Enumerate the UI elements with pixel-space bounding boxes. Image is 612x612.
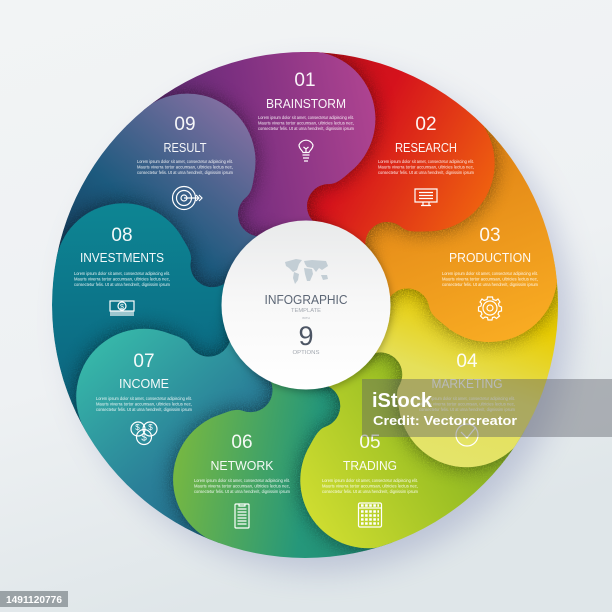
body text: Mauris viverra tortor accumsan, ultricies lectus nec, [74, 276, 170, 282]
body text: consectetur felis. Ut at urna hendrerit, dignissim ipsum [322, 489, 418, 494]
heading: PRODUCTION [449, 250, 531, 265]
body text: Lorem ipsum dolor sit amet, consectetur adipiscing elit. [322, 478, 418, 483]
petal 09 [56, 82, 276, 288]
number 07: 07 [133, 351, 155, 372]
panel: 03 production [442, 225, 538, 320]
label: options: OPTIONS [292, 350, 320, 356]
petal 03 [365, 112, 558, 357]
icon: coins [131, 422, 157, 444]
number 06: 06 [231, 432, 253, 453]
number 02: 02 [415, 114, 437, 135]
number 01: 01 [294, 70, 316, 91]
watermark: iStock: iStock [372, 390, 433, 412]
panel: 06 network [194, 432, 290, 528]
petal 08 [52, 192, 232, 432]
panel: 04 marketing [419, 351, 515, 446]
body text: Mauris viverra tortor accumsan, ultricies lectus nec, [442, 276, 538, 282]
body text [442, 271, 538, 287]
number 05: 05 [359, 432, 381, 453]
body text: consectetur felis. Ut at urna hendrerit, dignissim ipsum [378, 170, 474, 175]
body text: Lorem ipsum dolor sit amet, consectetur adipiscing elit. [258, 115, 354, 120]
body text: Mauris viverra tortor accumsan, ultricies lectus nec, [419, 402, 515, 406]
body text: Lorem ipsum dolor sit amet, consectetur adipiscing elit. [419, 396, 515, 401]
heading: TRADING [343, 458, 397, 473]
number 09: 09 [174, 114, 196, 135]
body text [96, 396, 192, 412]
wheel drop shadow [70, 70, 570, 570]
body text [419, 396, 515, 412]
heading: MARKETING [432, 376, 502, 391]
body text [258, 115, 354, 131]
petal 06 [160, 372, 392, 558]
body text [74, 271, 170, 287]
petal 01 base [143, 52, 324, 236]
heading: BRAINSTORM [266, 96, 346, 111]
body text [322, 478, 418, 494]
icon: coins: $ [135, 423, 140, 432]
icon: world map [285, 259, 328, 284]
body text: consectetur felis. Ut at urna hendrerit, dignissim ipsum [258, 126, 354, 131]
icon: coins: $ [148, 423, 153, 432]
heading: INVESTMENTS [80, 250, 164, 265]
body text: consectetur felis. Ut at urna hendrerit, dignissim ipsum [419, 407, 515, 412]
petal 02 [307, 52, 510, 265]
panel: 07 income [96, 351, 192, 444]
body text: Lorem ipsum dolor sit amet, consectetur adipiscing elit. [378, 159, 474, 164]
body text: consectetur felis. Ut at urna hendrerit, dignissim ipsum [74, 282, 170, 287]
body text: Mauris viverra tortor accumsan, ultricies lectus nec, [322, 484, 418, 488]
body text [378, 159, 474, 175]
heading: RESULT [164, 140, 207, 155]
body text: Lorem ipsum dolor sit amet, consectetur adipiscing elit. [442, 271, 538, 276]
label: with: WITH [302, 316, 310, 320]
image id tag [0, 591, 68, 607]
icon: monitor [415, 189, 437, 206]
petal 05 [288, 352, 524, 555]
body text: Mauris viverra tortor accumsan, ultricies lectus nec, [137, 164, 233, 170]
watermark: credit: Credit: Vectorcreator [373, 413, 517, 428]
heading: RESEARCH [395, 140, 457, 155]
petal 01 top [300, 52, 390, 226]
panel: 09 result [137, 114, 233, 210]
heading: INCOME [119, 376, 169, 391]
panel: 01 brainstorm [258, 70, 354, 161]
icon: gear [478, 297, 502, 320]
heading: NETWORK [210, 458, 274, 473]
circular wheel of nine petals [52, 52, 558, 558]
body text: Lorem ipsum dolor sit amet, consectetur adipiscing elit. [137, 159, 233, 164]
body text: Lorem ipsum dolor sit amet, consectetur adipiscing elit. [96, 396, 192, 401]
body text: consectetur felis. Ut at urna hendrerit, dignissim ipsum [442, 282, 538, 287]
watermark band [362, 379, 612, 437]
image id tag: 1491120776 [6, 594, 62, 606]
icon: banknote: $ [120, 304, 124, 311]
body text: Mauris viverra tortor accumsan, ultricies lectus nec, [258, 120, 354, 126]
panel: 02 research [378, 114, 474, 206]
number 04: 04 [456, 351, 478, 372]
big number 9: 9 [298, 321, 314, 351]
title: infographic: INFOGRAPHIC [264, 292, 348, 307]
panel: 05 trading [322, 432, 418, 527]
icon: calculator [358, 503, 382, 527]
icon: check circle [456, 424, 478, 446]
number 03: 03 [479, 225, 501, 246]
petal 04 [361, 261, 558, 481]
body text: Lorem ipsum dolor sit amet, consectetur adipiscing elit. [194, 478, 290, 483]
icon: coins: $ [141, 432, 147, 444]
panel: 08 investments [74, 225, 170, 316]
body text: Mauris viverra tortor accumsan, ultricies lectus nec, [96, 402, 192, 406]
icon: target [172, 186, 202, 210]
body text: consectetur felis. Ut at urna hendrerit, dignissim ipsum [96, 407, 192, 412]
body text: consectetur felis. Ut at urna hendrerit, dignissim ipsum [137, 170, 233, 175]
petal 07 [66, 316, 272, 543]
center circle [222, 220, 390, 390]
icon: light bulb [299, 140, 313, 161]
body text [137, 159, 233, 175]
body text: Lorem ipsum dolor sit amet, consectetur adipiscing elit. [74, 271, 170, 276]
body text: Mauris viverra tortor accumsan, ultricies lectus nec, [194, 484, 290, 488]
icon: server list [235, 504, 249, 528]
label: template: TEMPLATE [291, 308, 321, 314]
body text: consectetur felis. Ut at urna hendrerit, dignissim ipsum [194, 489, 290, 494]
number 08: 08 [111, 225, 133, 246]
body text [194, 478, 290, 494]
body text: Mauris viverra tortor accumsan, ultricies lectus nec, [378, 164, 474, 170]
